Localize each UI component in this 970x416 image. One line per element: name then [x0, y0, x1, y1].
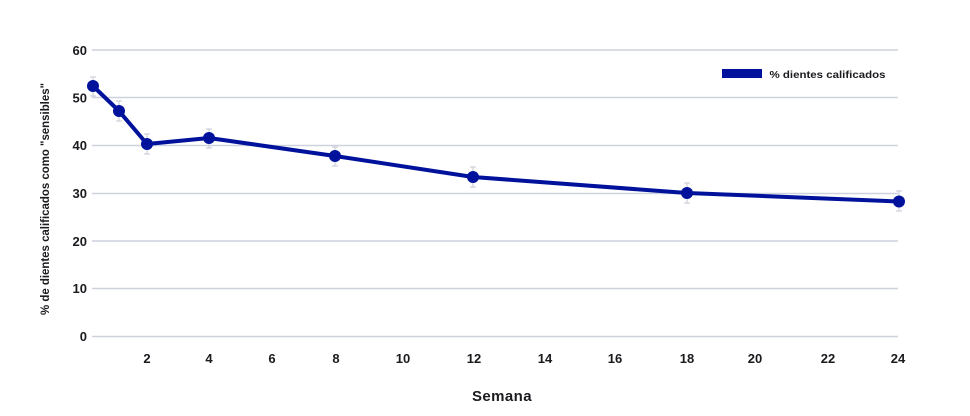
- x axis title: Semana: [472, 388, 532, 405]
- x axis tick labels: 14: [538, 351, 553, 366]
- legend: [722, 69, 886, 81]
- x axis tick labels: 10: [396, 351, 410, 366]
- error bars: [90, 77, 902, 211]
- x axis tick labels: 6: [268, 351, 276, 366]
- x axis tick labels: 4: [205, 351, 213, 366]
- y axis tick labels: 40: [73, 138, 87, 153]
- data line: [93, 86, 899, 202]
- y axis tick labels: 10: [73, 281, 87, 296]
- x axis tick labels: 16: [608, 351, 622, 366]
- y axis tick labels: 0: [80, 329, 87, 344]
- x axis tick labels: 8: [332, 351, 340, 366]
- x axis tick labels: [143, 351, 906, 366]
- x axis tick labels: 18: [680, 351, 694, 366]
- x axis tick labels: 20: [748, 351, 762, 366]
- x axis tick labels: 22: [821, 351, 835, 366]
- y axis title: % de dientes calificados como "sensibles": [38, 83, 52, 315]
- x axis tick labels: 12: [467, 351, 481, 366]
- data points: [87, 80, 905, 208]
- x axis tick labels: 24: [891, 351, 906, 366]
- x axis tick labels: 2: [143, 351, 151, 366]
- y axis tick labels: 20: [73, 234, 87, 249]
- y axis tick labels: 60: [73, 43, 87, 58]
- legend: % dientes calificados: [770, 69, 886, 81]
- y axis tick labels: [73, 43, 87, 344]
- y axis tick labels: 30: [73, 186, 87, 201]
- y axis tick labels: 50: [73, 90, 87, 106]
